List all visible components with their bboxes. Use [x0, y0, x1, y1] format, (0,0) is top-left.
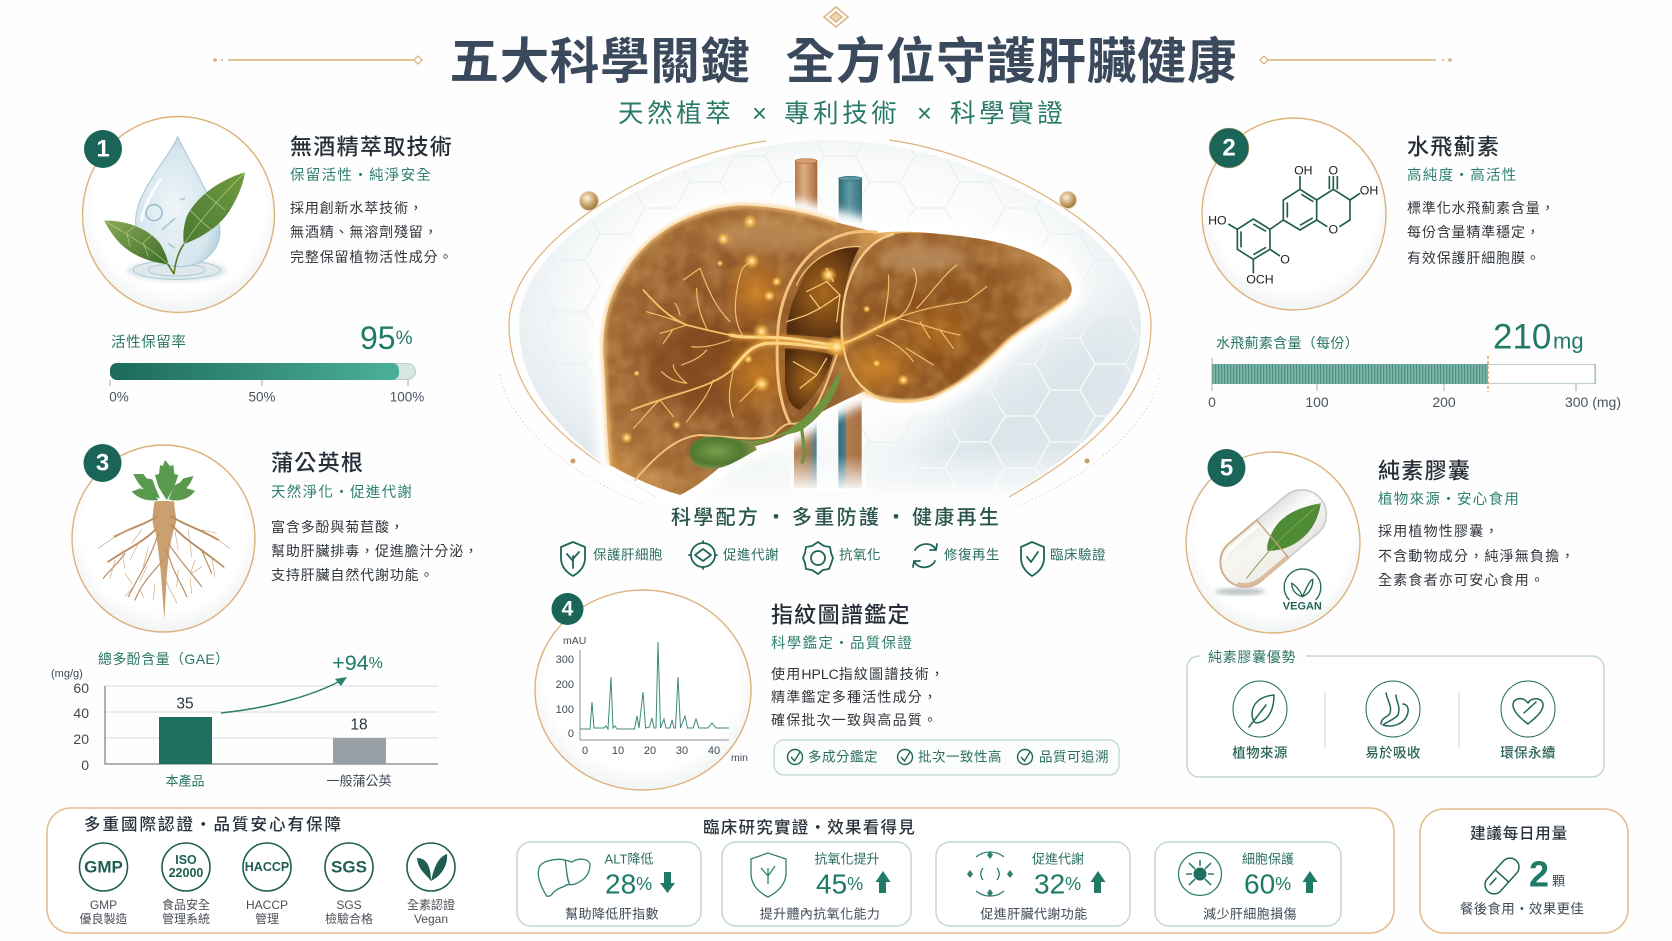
certification badges: GMP: [84, 858, 123, 876]
icon: renew arrows: [913, 544, 937, 567]
polyphenol bar chart: 一般蒲公英: [326, 774, 392, 788]
panel: 4 HPLC fingerprint: [535, 590, 1119, 790]
certification labels: 檢驗合格: [325, 911, 373, 926]
molecule diagram: HO: [1208, 214, 1227, 228]
dose heading: 建議每日用量: [1470, 824, 1568, 842]
benefit labels: 抗氧化: [839, 548, 881, 562]
description: 精準鑑定多種活性成分，: [771, 689, 938, 705]
vessels upper: [795, 159, 862, 234]
vein glow: [730, 318, 897, 368]
liver artwork: [603, 159, 1072, 495]
description: 幫助肝臟排毒，促進膽汁分泌，: [271, 543, 479, 559]
feature pill: [774, 740, 1119, 775]
card: metabolism: 32%: [1034, 868, 1081, 900]
edge glow: [603, 206, 837, 465]
panel: 1 alcohol-free extraction: [82, 116, 453, 404]
benefit labels: 修復再生: [944, 546, 1000, 562]
vegan advantages box: 植物來源: [1232, 744, 1288, 760]
panel: recommended daily dose: [1420, 809, 1628, 933]
polyphenol bar chart: 18: [350, 716, 368, 734]
description: [1407, 200, 1556, 266]
feature pill: 批次一致性高: [918, 748, 1002, 764]
certification labels: [79, 897, 455, 926]
card: ALT: 幫助降低肝指數: [565, 906, 659, 922]
title: 全方位守護肝臟健康: [786, 34, 1237, 90]
liver body: [603, 206, 1072, 495]
progress chart: 95%: [360, 320, 413, 356]
number badge: 1: [96, 136, 110, 162]
title: [450, 34, 1237, 90]
number badge: [552, 593, 584, 625]
progress chart: 0%: [109, 390, 129, 404]
benefit labels: 臨床驗證: [1050, 546, 1106, 562]
right lobe: [842, 233, 1072, 402]
header: [213, 7, 1452, 128]
description: 有效保護肝細胞膜。: [1407, 250, 1541, 266]
molecule diagram: OH: [1294, 164, 1313, 178]
content bar chart: mg: [1553, 328, 1584, 354]
illustration circle: [72, 445, 255, 632]
panel: 3 dandelion root: [51, 444, 479, 788]
description: 採用創新水萃技術，: [290, 200, 424, 216]
progress chart: [109, 320, 424, 404]
card: ALT: 28%: [605, 868, 652, 900]
certification labels: 優良製造: [79, 911, 128, 926]
card: ALT: [517, 842, 701, 926]
certification labels: Vegan: [414, 912, 448, 926]
certification labels: GMP: [90, 898, 117, 912]
molecule diagram: [1208, 164, 1378, 286]
content bar chart: 水飛薊素含量（每份）: [1216, 335, 1359, 351]
icon: metabolism: [689, 541, 717, 569]
certification labels: SGS: [336, 898, 362, 912]
dose unit: 顆: [1552, 874, 1565, 888]
certification badges: HACCP: [245, 860, 289, 874]
card: antioxidant: 提升體內抗氧化能力: [760, 906, 880, 922]
description: 採用植物性膠囊，: [1378, 523, 1500, 539]
description: [290, 200, 453, 265]
description: 富含多酚與菊苣酸，: [271, 519, 405, 535]
certification badges: ISO: [175, 853, 197, 867]
chromatogram chart: 200: [556, 679, 574, 691]
polyphenol bar chart: 35: [176, 696, 194, 712]
heading: 純素膠囊: [1378, 458, 1471, 484]
icon: top diamond: [824, 7, 848, 27]
content bar chart: 100: [1305, 394, 1329, 410]
subtitle: [618, 100, 1066, 128]
molecule diagram: O: [1329, 164, 1338, 178]
certification labels: 管理系統: [162, 911, 210, 926]
panel: science formula tagline and benefit icons: [561, 506, 1106, 576]
number badge: [1208, 449, 1246, 487]
subtitle: 專利技術: [784, 100, 900, 128]
illustration circle: [1202, 118, 1386, 310]
number badge: 5: [1220, 454, 1233, 482]
progress chart: 50%: [248, 390, 276, 404]
card: antioxidant: 抗氧化提升: [814, 852, 880, 866]
polyphenol bar chart: 0: [81, 757, 89, 773]
icon: dandelion root: [98, 460, 230, 620]
icon: capsule with leaf: VEGAN: [1283, 601, 1322, 613]
polyphenol bar chart: 40: [73, 705, 89, 721]
description: 標準化水飛薊素含量，: [1407, 200, 1556, 216]
chromatogram chart: 300: [556, 654, 574, 666]
clinical heading: 臨床研究實證・效果看得見: [703, 817, 916, 837]
number badge: 4: [562, 598, 574, 620]
description: 使用HPLC指紋圖譜技術，: [771, 666, 945, 682]
vegan advantages box: 易於吸收: [1365, 746, 1421, 760]
gold bands: [635, 231, 933, 480]
card: cell protection: 細胞保護: [1242, 852, 1294, 866]
icon: shield sprout: [561, 542, 585, 576]
card: ALT: ALT降低: [605, 852, 653, 866]
card: metabolism: 促進肝臟代謝功能: [980, 906, 1088, 922]
vegan advantages box: 純素膠囊優勢: [1208, 649, 1296, 665]
background disc with hexagons: [519, 140, 1150, 505]
certification badges: [80, 843, 455, 891]
icon: capsule with leaf: [1210, 480, 1336, 613]
subtitle: ×: [917, 100, 936, 128]
chromatogram chart: 20: [644, 745, 656, 757]
icon row: [561, 541, 1044, 576]
tagline: ・: [766, 507, 788, 529]
polyphenol bar chart: (mg/g): [51, 668, 83, 680]
tagline: 多重防護: [792, 506, 881, 529]
certification heading: 多重國際認證・品質安心有保障: [84, 814, 343, 834]
icon: heart leaf: [1501, 681, 1555, 737]
gold beads: [570, 192, 1090, 464]
icon: shield check: [1021, 542, 1044, 576]
vegan advantages box: [1187, 648, 1604, 777]
card: antioxidant: [722, 842, 911, 926]
polyphenol bar chart: [51, 651, 438, 788]
card: cell protection: 60%: [1244, 868, 1291, 900]
subtitle: 天然植萃: [618, 100, 734, 128]
chromatogram chart: mAU: [563, 635, 586, 647]
subtitle: ×: [752, 100, 770, 128]
polyphenol bar chart: 20: [73, 731, 89, 747]
card: metabolism: [936, 842, 1130, 926]
panel: 2 silymarin: [1202, 118, 1621, 410]
number badge: [84, 130, 122, 168]
gallbladder and duct: [690, 373, 841, 469]
chromatogram chart: 100: [556, 704, 574, 716]
heading: 指紋圖譜鑑定: [771, 602, 911, 628]
heading: 水飛薊素: [1407, 134, 1500, 160]
heading: 蒲公英根: [271, 450, 364, 476]
right ornament line: [1260, 56, 1452, 64]
polyphenol bar chart: 總多酚含量（GAE）: [98, 651, 230, 667]
tagline: 健康再生: [912, 506, 1001, 529]
description: 全素食者亦可安心食用。: [1378, 572, 1545, 588]
card: cell protection: 減少肝細胞損傷: [1203, 906, 1297, 922]
panel: 5 vegan capsule: [1186, 449, 1604, 777]
description: [771, 666, 945, 728]
illustration circle: [535, 590, 751, 790]
description: 確保批次一致與高品質。: [771, 712, 938, 728]
glowing sparks: [621, 214, 909, 444]
card: cell protection: [1155, 842, 1341, 926]
heading: 無酒精萃取技術: [290, 134, 453, 160]
molecule diagram: O: [1329, 222, 1338, 236]
progress chart: 100%: [390, 390, 424, 404]
description: 完整保留植物活性成分。: [290, 249, 453, 265]
tagline: 科學鑑定・品質保證: [771, 634, 913, 652]
molecule diagram: OH: [1360, 184, 1378, 198]
polyphenol bar chart: 60: [73, 680, 89, 696]
tagline: [671, 506, 1001, 529]
content bar chart: [1208, 318, 1621, 410]
tagline: 保留活性・純淨安全: [290, 167, 432, 184]
benefit labels: 促進代謝: [723, 548, 779, 562]
subtitle: 科學實證: [950, 100, 1066, 128]
bile vein network: [632, 263, 987, 428]
tagline: 高純度・高活性: [1407, 167, 1518, 184]
chromatogram chart: 40: [708, 745, 720, 757]
tagline: 天然淨化・促進代謝: [271, 484, 413, 501]
panel: central liver illustration: [500, 140, 1160, 505]
illustration circle: [1186, 452, 1360, 633]
description: [271, 519, 479, 583]
cutaway window: [787, 247, 860, 339]
content bar chart: 210: [1493, 318, 1551, 356]
tagline: 植物來源・安心食用: [1378, 491, 1520, 508]
gold orbit arcs: [500, 140, 1160, 505]
icon: antioxidant gear: [803, 542, 833, 574]
amber inner glow: [713, 252, 983, 418]
description: 支持肝臟自然代謝功能。: [271, 567, 434, 583]
panel: certifications and clinical results: [47, 808, 1394, 933]
icon: leaf: [1233, 681, 1287, 737]
benefit labels: 保護肝細胞: [593, 548, 663, 562]
polyphenol bar chart: 本產品: [165, 774, 205, 788]
vegan advantages box: 環保永續: [1500, 746, 1556, 760]
highlights: [650, 220, 970, 412]
icon: stomach: [1366, 681, 1420, 737]
illustration circle: [82, 116, 274, 312]
feature pill: 多成分鑑定: [808, 750, 878, 764]
title: 五大科學關鍵: [450, 34, 751, 90]
icon: capsule: [1481, 854, 1523, 898]
content bar chart: 0: [1208, 394, 1216, 410]
benefit labels: [593, 546, 1106, 562]
certification labels: 全素認證: [407, 897, 455, 912]
chromatogram chart: 30: [676, 745, 688, 757]
chromatogram chart: 10: [612, 745, 624, 757]
feature pill: 品質可追溯: [1039, 750, 1109, 764]
card: antioxidant: 45%: [816, 868, 863, 900]
progress chart: 活性保留率: [111, 334, 186, 351]
description: 每份含量精準穩定，: [1407, 224, 1541, 240]
outer glow: [603, 206, 1072, 495]
content bar chart: 300 (mg): [1565, 394, 1621, 410]
certification labels: 食品安全: [162, 897, 210, 912]
certification labels: HACCP: [246, 898, 288, 912]
number badge: 3: [96, 450, 109, 476]
molecule diagram: OCH: [1246, 272, 1274, 286]
certification badges: 22000: [169, 866, 203, 880]
polyphenol bar chart: +94%: [332, 651, 383, 675]
number badge: [84, 444, 122, 482]
description: 無酒精、無溶劑殘留，: [290, 224, 438, 240]
tagline: 科學配方: [671, 506, 760, 529]
card: metabolism: 促進代謝: [1032, 852, 1084, 866]
number badge: [1209, 128, 1249, 168]
chromatogram chart: min: [731, 752, 748, 764]
chromatogram chart: 0: [582, 745, 588, 757]
description: [1378, 523, 1576, 588]
certification badges: SGS: [331, 858, 367, 876]
molecule diagram: O: [1280, 252, 1290, 266]
description: 不含動物成分，純淨無負擔，: [1378, 548, 1576, 564]
certification labels: 管理: [255, 911, 279, 926]
tagline: ・: [886, 507, 908, 529]
icon: water drop and leaves: [104, 137, 245, 281]
content bar chart: 200: [1432, 394, 1456, 410]
dose note: 餐後食用・效果更佳: [1460, 900, 1584, 916]
chromatogram chart: [556, 635, 748, 764]
left ornament line: [213, 56, 422, 64]
dose number: 2: [1529, 854, 1549, 894]
vessels lower: [790, 392, 867, 492]
outer frame: [47, 808, 1394, 933]
chromatogram chart: 0: [568, 728, 574, 740]
number badge: 2: [1222, 134, 1236, 162]
